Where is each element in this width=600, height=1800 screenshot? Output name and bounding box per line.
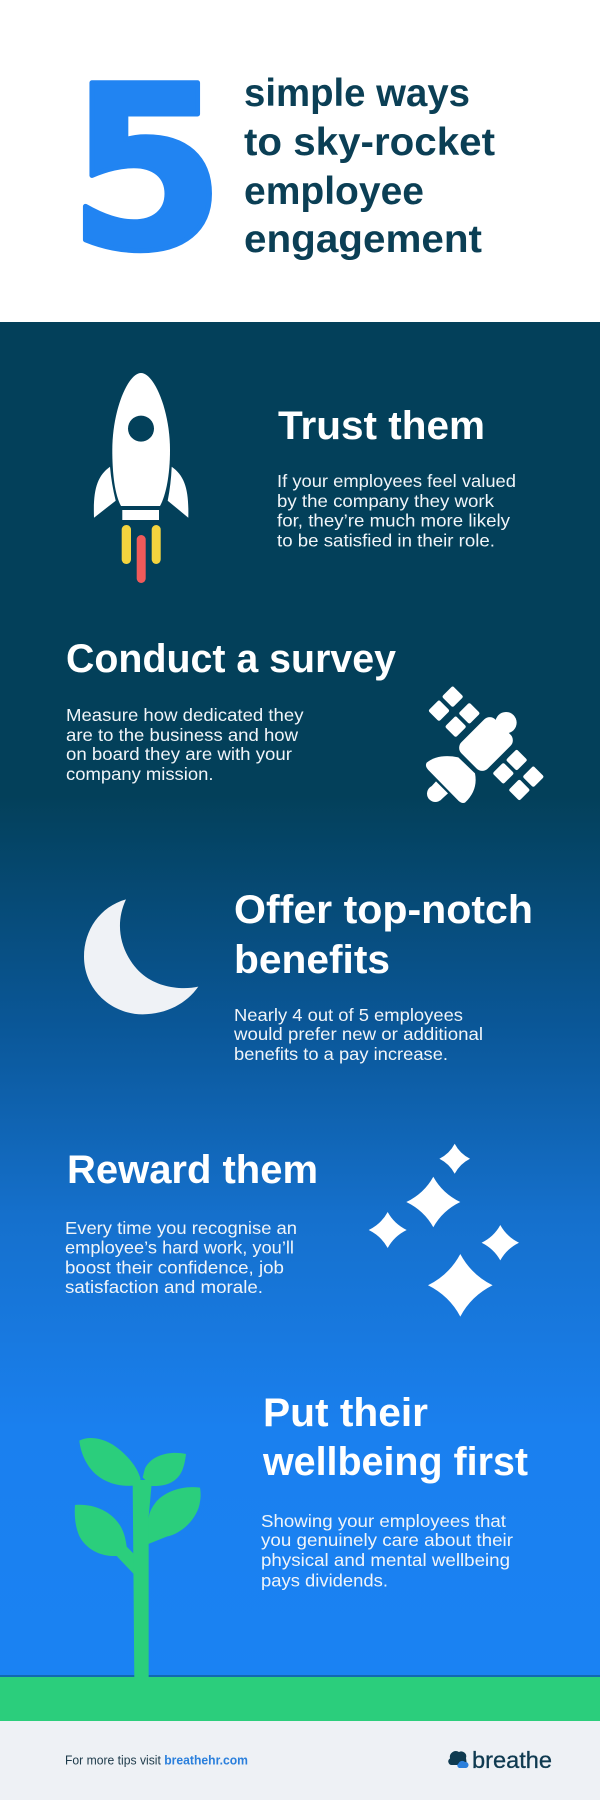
heading: conduct a survey: Conduct a survey (66, 637, 397, 681)
heading: put their wellbeing first: wellbeing first (262, 1440, 528, 1484)
icon: moon (84, 899, 198, 1014)
text: offer top-notch benefits: Nearly 4 out of 5 employees (234, 1005, 463, 1025)
text: put their wellbeing first: pays dividends. (261, 1570, 388, 1590)
heading: put their wellbeing first (262, 1391, 528, 1484)
heading: offer top-notch benefits: benefits (234, 938, 390, 982)
text: reward them: employee’s hard work, you’ll (65, 1238, 294, 1258)
section: offer top-notch benefits (84, 888, 533, 1064)
text: conduct a survey: Measure how dedicated they (66, 705, 304, 725)
logo: breathe: breathe (472, 1747, 552, 1773)
text: put their wellbeing first: you genuinely care about their (261, 1530, 513, 1550)
text: put their wellbeing first: physical and mental wellbeing (261, 1550, 510, 1570)
title: employee (244, 170, 424, 213)
text: offer top-notch benefits: benefits to a pay increase. (234, 1044, 448, 1064)
panel: sky gradient background (0, 322, 600, 1676)
heading: offer top-notch benefits: Offer top-notch (234, 888, 533, 932)
text: conduct a survey: are to the business and how (66, 725, 298, 745)
section: conduct a survey (66, 637, 544, 803)
text: conduct a survey: on board they are with your (66, 744, 292, 764)
icon: stars (369, 1144, 519, 1317)
icon: plant (75, 1438, 201, 1680)
text: reward them: Every time you recognise an (65, 1218, 297, 1238)
big number 5: 5 (68, 38, 225, 302)
icon: rocket (94, 373, 188, 583)
text: trust them: to be satisfied in their role. (277, 530, 495, 550)
heading: reward them: Reward them (67, 1148, 318, 1192)
title (244, 72, 495, 261)
section: put their wellbeing first (75, 1391, 528, 1680)
text: trust them: If your employees feel valued (277, 471, 516, 491)
text: conduct a survey: company mission. (66, 764, 214, 784)
text: reward them: boost their confidence, job (65, 1258, 284, 1278)
ground (0, 1675, 600, 1721)
panel: footer (0, 1721, 600, 1800)
section: trust them (94, 373, 516, 583)
text: offer top-notch benefits (233, 1005, 483, 1064)
title: engagement (244, 218, 482, 261)
text: offer top-notch benefits: would prefer new or additional (233, 1024, 483, 1044)
text: trust them: for, they’re much more likely (277, 510, 510, 530)
text: put their wellbeing first (261, 1511, 513, 1590)
heading: trust them: Trust them (278, 404, 485, 448)
text: trust them: by the company they work (277, 491, 494, 511)
footer text: For more tips visit breathehr.com (65, 1752, 248, 1768)
text: conduct a survey (66, 705, 304, 784)
panel: header (0, 0, 600, 322)
title: simple ways (244, 72, 470, 115)
text: reward them: satisfaction and morale. (65, 1277, 263, 1297)
heading: offer top-notch benefits (234, 888, 533, 982)
title: to sky-rocket (244, 121, 495, 164)
text: trust them (277, 471, 516, 550)
section: reward them (65, 1144, 519, 1317)
text: put their wellbeing first: Showing your employees that (261, 1511, 506, 1531)
icon: satellite (426, 686, 544, 803)
text: reward them (65, 1218, 297, 1297)
heading: put their wellbeing first: Put their (263, 1391, 428, 1435)
